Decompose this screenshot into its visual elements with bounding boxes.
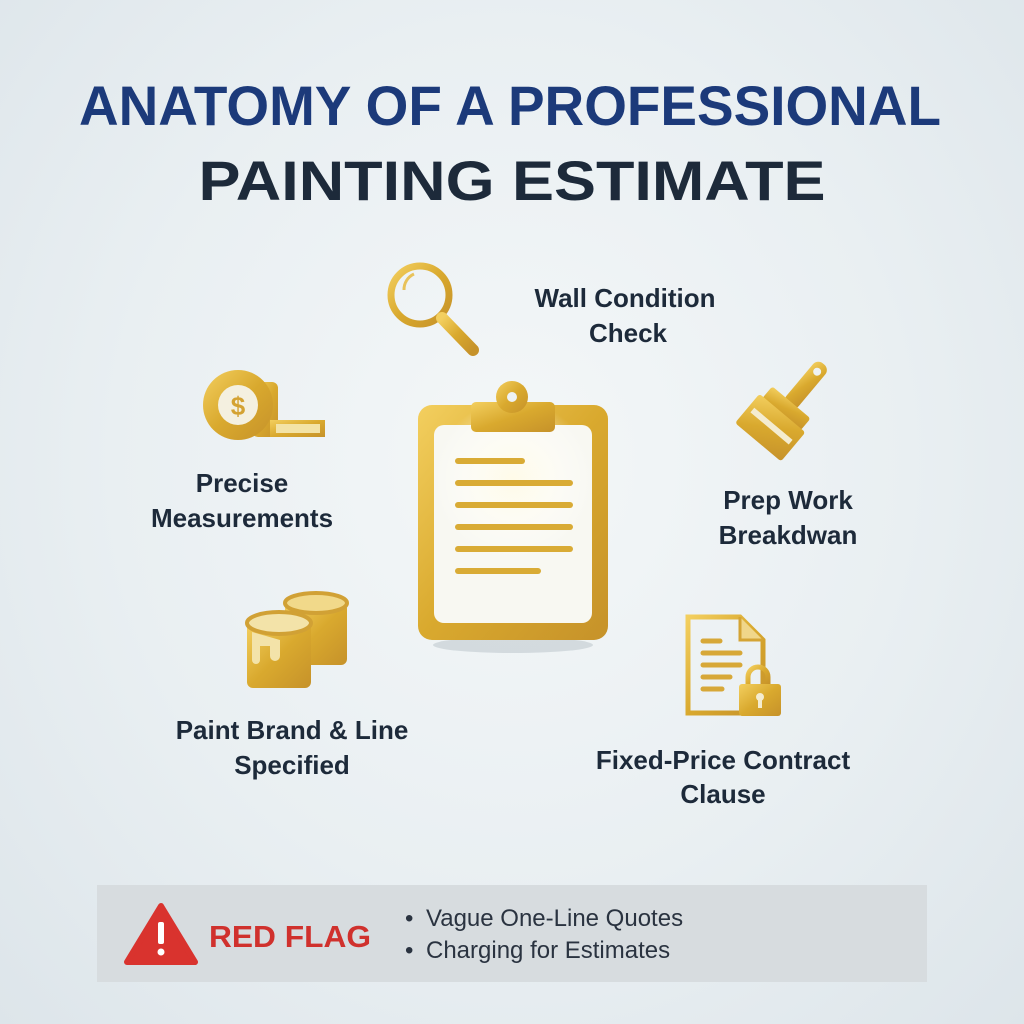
title bbox=[79, 74, 941, 212]
label: paint brand & line specified: Paint Brand & Line bbox=[176, 715, 408, 745]
label: precise measurements bbox=[151, 468, 333, 533]
label: fixed-price contract clause: Fixed-Price Contract bbox=[596, 745, 850, 775]
label: paint brand & line specified bbox=[176, 715, 408, 780]
label: wall condition check bbox=[534, 283, 716, 348]
label: fixed-price contract clause: Clause bbox=[680, 779, 766, 809]
label: paint brand & line specified: Specified bbox=[234, 750, 350, 780]
list: red flag items: Vague One-Line Quotes bbox=[426, 905, 683, 932]
label: wall condition check: Check bbox=[589, 318, 668, 348]
title: ANATOMY OF A PROFESSIONAL bbox=[79, 74, 941, 137]
icon: paint cans bbox=[247, 593, 347, 688]
heading: red flag: RED FLAG bbox=[209, 919, 371, 954]
panel: red flag bbox=[97, 885, 927, 982]
list: red flag items bbox=[405, 905, 683, 964]
label: precise measurements: Measurements bbox=[151, 503, 333, 533]
icon: tape measure bbox=[203, 370, 325, 440]
list: red flag items: • bbox=[405, 905, 413, 932]
icon: tape measure: $ bbox=[231, 391, 246, 421]
title: PAINTING ESTIMATE bbox=[198, 149, 826, 212]
label: precise measurements: Precise bbox=[196, 468, 288, 498]
list: red flag items: Charging for Estimates bbox=[426, 937, 670, 964]
icon: warning triangle bbox=[127, 906, 195, 962]
label: prep work breakdown: Breakdwan bbox=[719, 520, 857, 550]
list: red flag items: • bbox=[405, 937, 413, 964]
icon: contract document with lock bbox=[688, 617, 781, 716]
icon: magnifier bbox=[391, 266, 473, 350]
icon: paint scraper brush bbox=[735, 345, 847, 461]
label: prep work breakdown bbox=[719, 485, 857, 550]
label: fixed-price contract clause bbox=[596, 745, 850, 809]
icon: central clipboard bbox=[418, 381, 608, 653]
label: prep work breakdown: Prep Work bbox=[723, 485, 853, 515]
label: wall condition check: Wall Condition bbox=[534, 283, 716, 313]
